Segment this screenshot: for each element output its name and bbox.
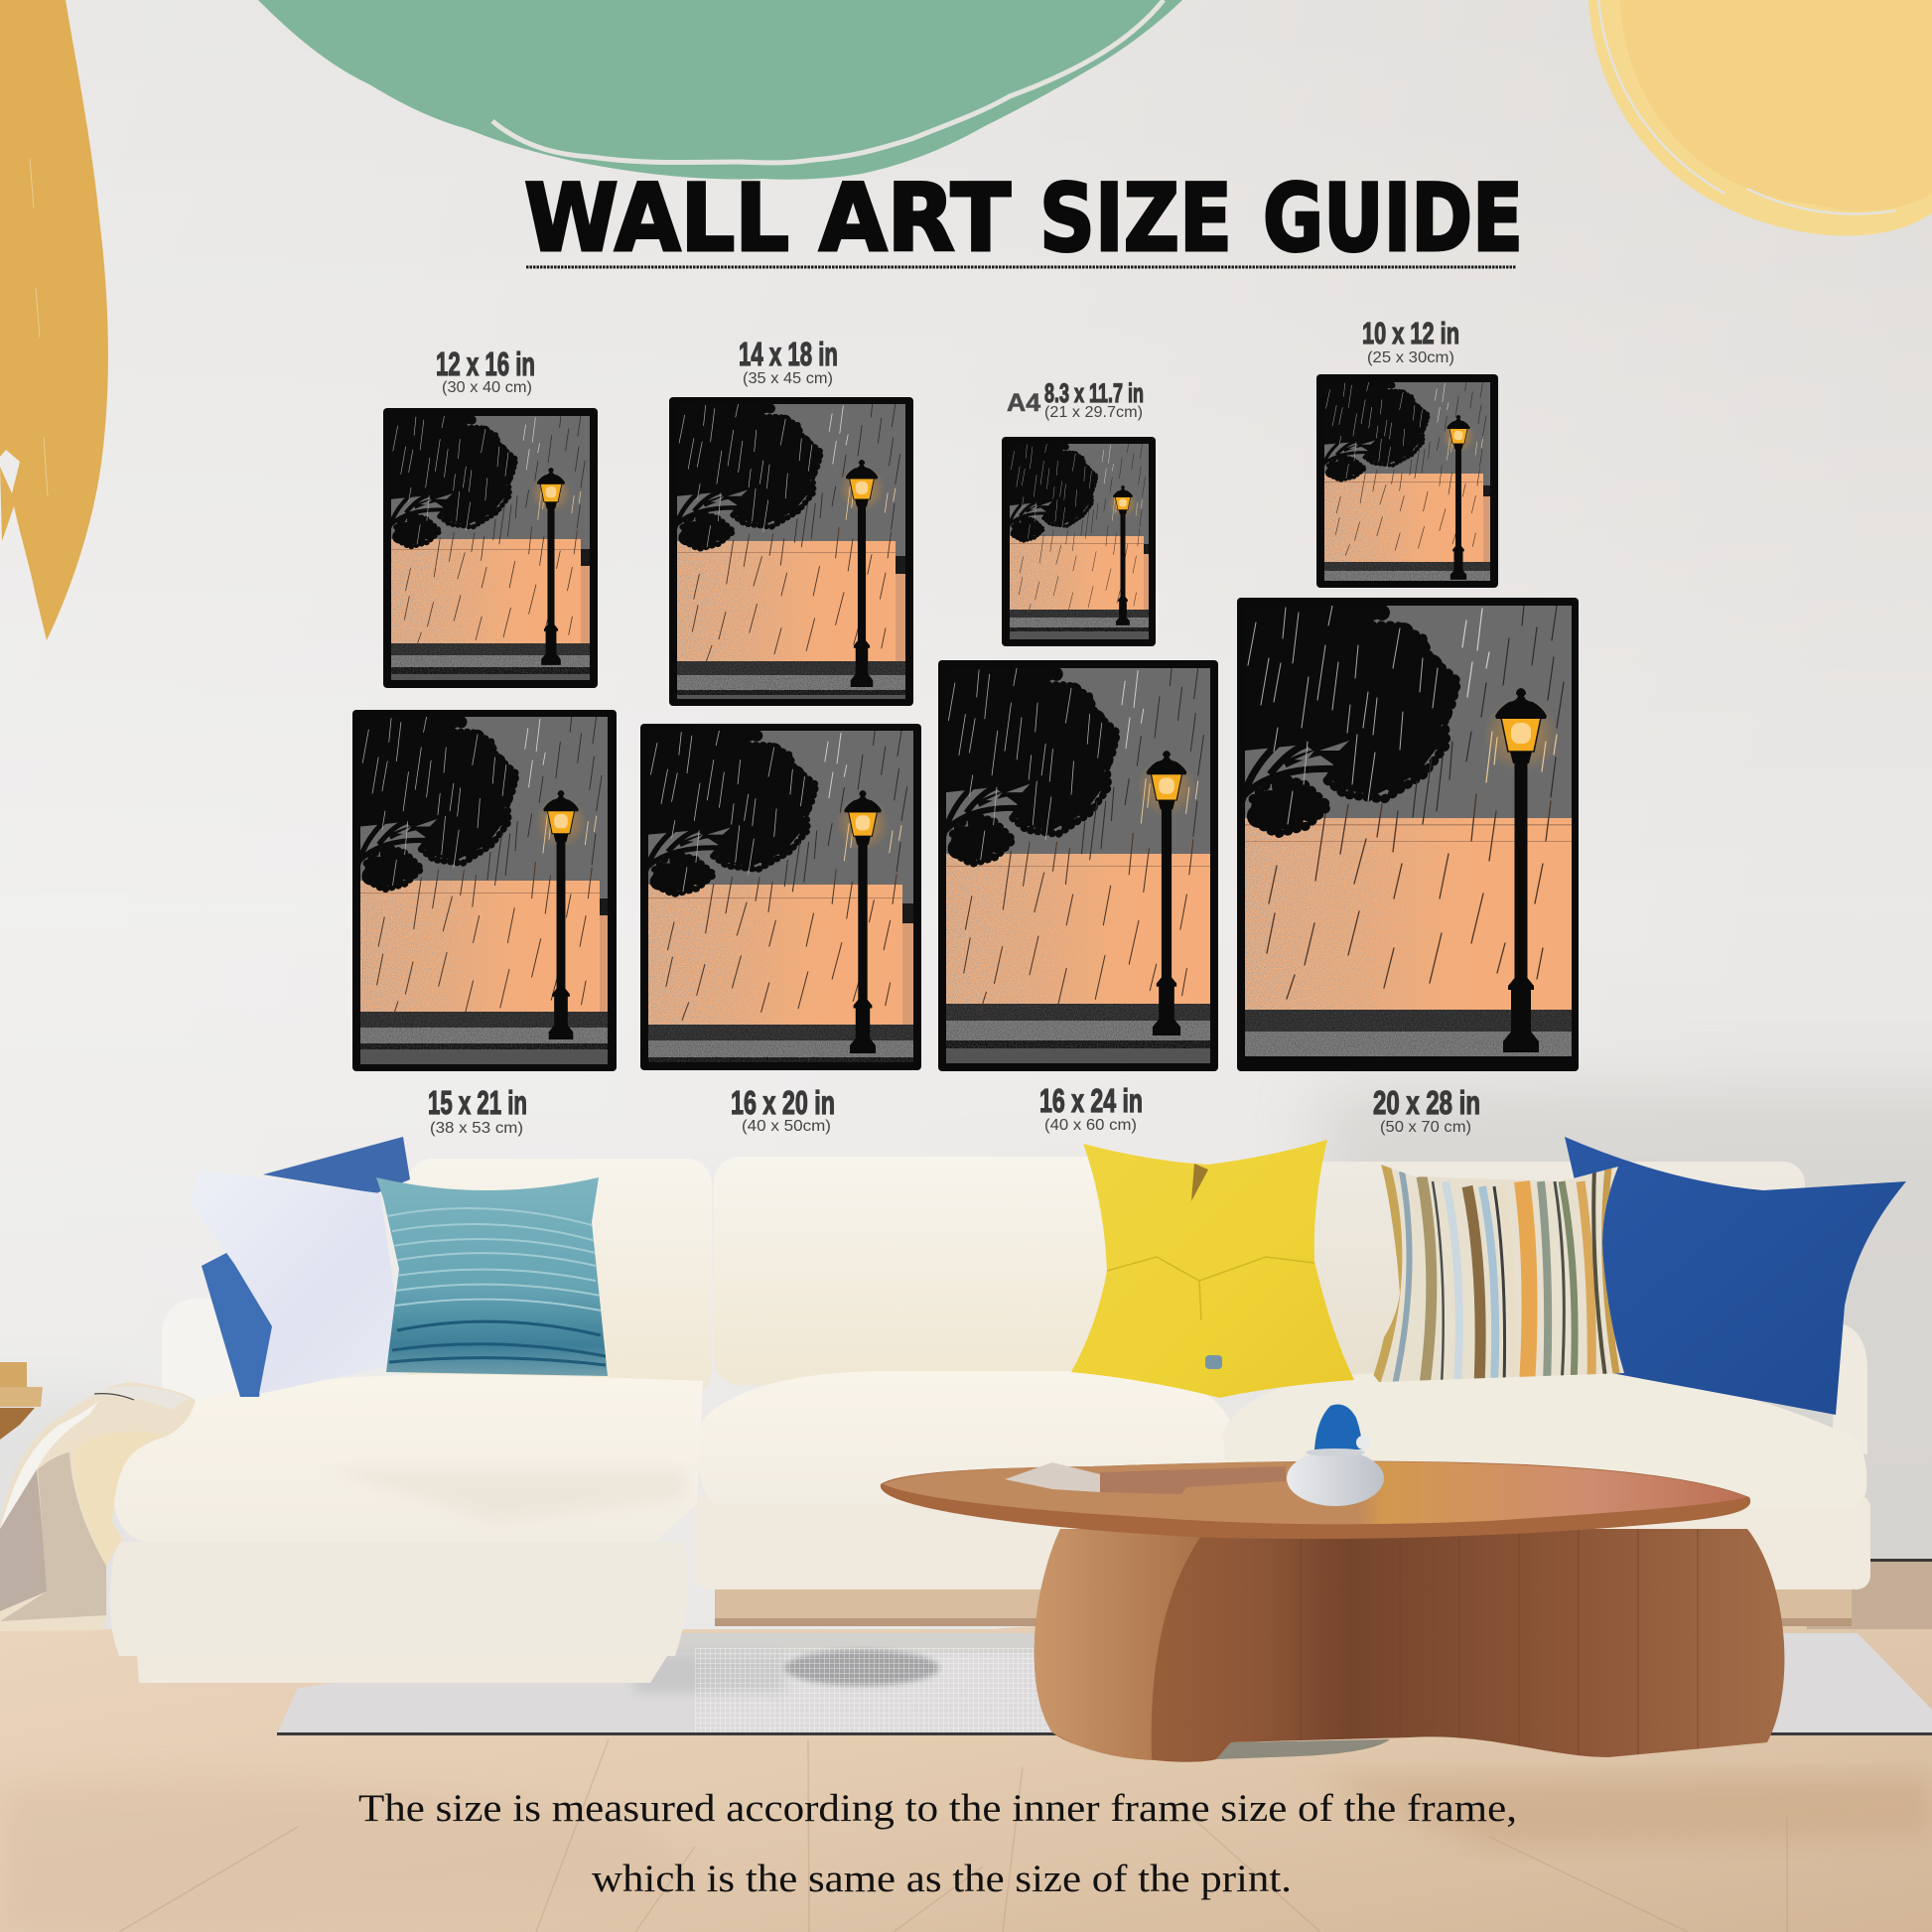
label: 16 x 20 in: 16 x 20 in — [731, 1084, 835, 1121]
title: ART — [819, 165, 1011, 273]
frame: 15 x 21 in — [352, 710, 617, 1071]
decorative brush: yellow circle — [1588, 0, 1932, 236]
label: 14 x 18 in — [739, 336, 838, 387]
label: 14 x 18 in: 14 x 18 in — [739, 336, 838, 372]
sofa — [109, 1157, 1870, 1683]
chaise seat — [113, 1374, 703, 1542]
title: WALL — [524, 165, 789, 273]
label: 16 x 20 in: (40 x 50cm) — [742, 1118, 831, 1135]
label: 20 x 28 in — [1373, 1084, 1480, 1136]
vase with blue figure — [1287, 1404, 1384, 1506]
footnote text: The size is measured according to the inner frame size of the frame, — [358, 1787, 1517, 1830]
label: 10 x 12 in — [1362, 316, 1459, 366]
frame: A4 — [1002, 437, 1156, 646]
footnote text — [358, 1787, 1517, 1900]
frame: 16 x 24 in — [938, 660, 1218, 1071]
rug — [277, 1633, 1932, 1735]
label: 16 x 24 in — [1039, 1082, 1143, 1134]
side table and books — [0, 1362, 43, 1440]
footnote text: which is the same as the size of the print. — [592, 1858, 1292, 1900]
label: 10 x 12 in: (25 x 30cm) — [1367, 349, 1454, 366]
label: 15 x 21 in: 15 x 21 in — [428, 1084, 527, 1121]
coffee table base — [1035, 1529, 1784, 1767]
book on table — [1005, 1462, 1286, 1494]
right seat cushion — [1223, 1373, 1866, 1507]
label: 12 x 16 in — [436, 345, 535, 396]
chaise plinth — [137, 1656, 667, 1683]
left arm — [162, 1299, 246, 1428]
title underline — [526, 266, 1516, 268]
label: 20 x 28 in: 20 x 28 in — [1373, 1084, 1480, 1121]
label: A4: A4 — [1007, 389, 1040, 417]
label: 14 x 18 in: (35 x 45 cm) — [743, 370, 833, 387]
title — [524, 165, 1523, 273]
pillow: white — [190, 1170, 405, 1394]
frame: 16 x 20 in — [640, 724, 921, 1070]
label: A4 — [1007, 378, 1144, 421]
chaise lower — [109, 1542, 688, 1656]
floor — [0, 1559, 1932, 1932]
label: 12 x 16 in: (30 x 40 cm) — [442, 379, 532, 396]
frame: 12 x 16 in — [383, 408, 598, 688]
label: A4: 8.3 x 11.7 in — [1044, 378, 1144, 408]
pillow: yellow — [1071, 1140, 1354, 1398]
pillow: back blue left — [202, 1137, 410, 1397]
label: 12 x 16 in: 12 x 16 in — [436, 345, 535, 382]
title: SIZE — [1039, 165, 1232, 273]
label: 20 x 28 in: (50 x 70 cm) — [1380, 1119, 1471, 1136]
decorative brush: mustard stroke — [0, 0, 108, 640]
right arm — [1832, 1323, 1867, 1454]
label: A4: (21 x 29.7cm) — [1044, 404, 1143, 421]
frame: 20 x 28 in — [1237, 598, 1579, 1071]
pillow: teal — [376, 1177, 608, 1376]
frame: 10 x 12 in — [1316, 374, 1498, 588]
label: 10 x 12 in: 10 x 12 in — [1362, 316, 1459, 350]
title: GUIDE — [1263, 165, 1523, 273]
coffee table top — [881, 1461, 1750, 1539]
label: 16 x 24 in: 16 x 24 in — [1039, 1082, 1143, 1119]
pillow: navy — [1565, 1137, 1906, 1415]
frame: 14 x 18 in — [669, 397, 913, 706]
middle seat cushion — [697, 1371, 1237, 1504]
throw blanket — [0, 1382, 196, 1631]
decorative brush: green arc — [258, 0, 1182, 180]
pillow: striped — [1364, 1162, 1624, 1385]
label: 16 x 20 in — [731, 1084, 835, 1135]
label: 15 x 21 in — [428, 1084, 527, 1137]
sofa back cushions — [407, 1157, 1805, 1397]
label: 15 x 21 in: (38 x 53 cm) — [430, 1120, 523, 1137]
label: 16 x 24 in: (40 x 60 cm) — [1044, 1117, 1137, 1134]
right section base — [695, 1494, 1870, 1626]
